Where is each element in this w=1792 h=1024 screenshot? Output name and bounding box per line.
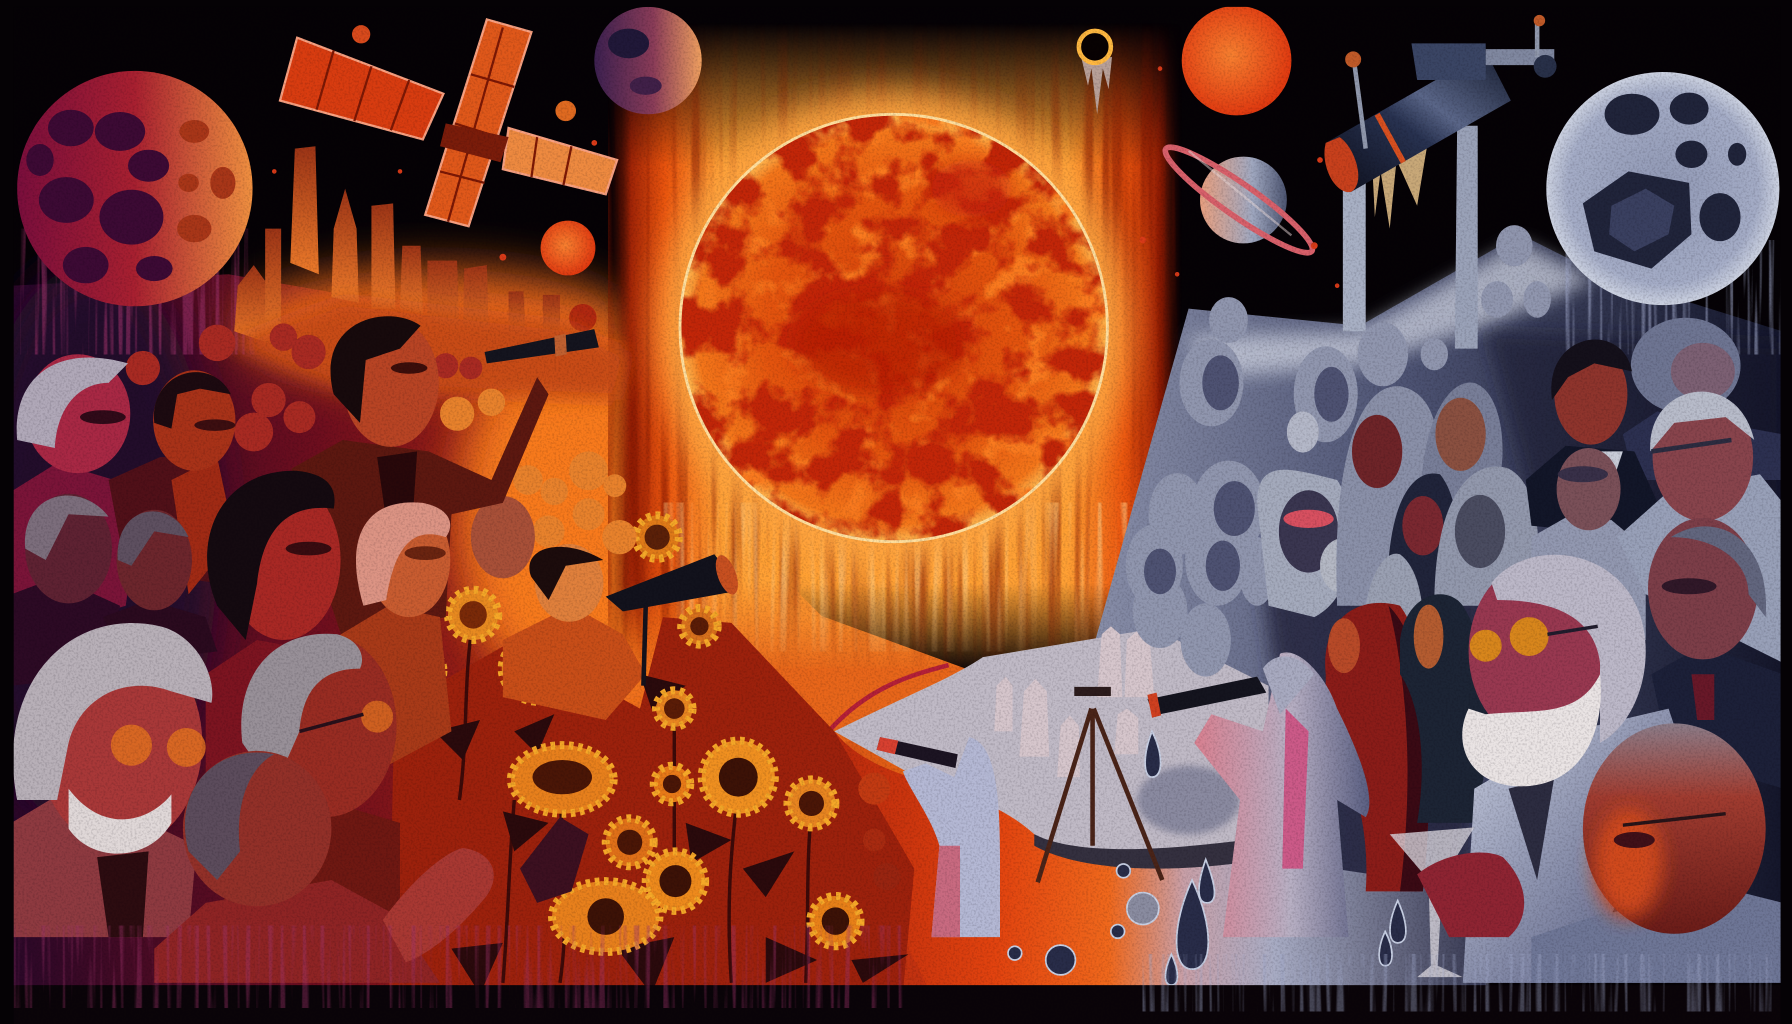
bald man with hands (154, 751, 589, 983)
large white-haired man with glasses (11, 623, 212, 937)
woman with telescope in robe (1147, 652, 1369, 937)
right men in suits (1526, 318, 1783, 789)
water (549, 731, 1486, 1006)
right hill of hooded figures (1086, 234, 1783, 983)
person: dark old man (11, 494, 120, 686)
right moon (1546, 72, 1783, 354)
bald man lower right (1531, 723, 1783, 983)
woman with pale hair (331, 502, 451, 777)
ringed planet (1157, 136, 1321, 264)
eclipse ring (1079, 31, 1112, 114)
left warm backdrop (0, 263, 1029, 1006)
small planets left (352, 25, 597, 331)
person: old man in suit (103, 510, 217, 663)
person: white-haired man upper left (11, 354, 137, 640)
man dark hair in suit (1526, 339, 1663, 537)
man bald grey top right (1623, 318, 1783, 480)
top purple planet (594, 7, 702, 114)
small man with glasses (1531, 448, 1646, 640)
red hooded cloak figure (1325, 603, 1430, 891)
person: man with glasses (109, 370, 235, 594)
left crowd: back row men (11, 354, 235, 686)
hooded figures, front group (1336, 382, 1538, 674)
bearded man with glasses (1462, 555, 1691, 983)
child in hood with telescope (877, 737, 1000, 937)
left cratered planet (17, 71, 255, 354)
old man with glasses (1617, 392, 1783, 663)
telescope woman with dark ponytail (503, 544, 742, 720)
bald old man right (1648, 518, 1783, 789)
sparse red stars (272, 66, 1339, 288)
orange planet top right (1182, 6, 1291, 115)
water droplets (1008, 731, 1406, 985)
sun (674, 109, 1114, 549)
tripod (1038, 691, 1162, 882)
orange city skyline (229, 146, 629, 400)
silver shore and ghost figures (829, 626, 1269, 869)
sun corona with vertical streaks (608, 23, 1182, 669)
dripping bottom border (0, 926, 1792, 1024)
left crowd: distant skull faces (126, 323, 637, 578)
left sunflower field (389, 515, 914, 994)
hand holding martini glass (1390, 827, 1524, 977)
satellite (280, 19, 617, 226)
dark teal hooded figure (1400, 594, 1488, 823)
hooded crowd, silver side (1126, 225, 1551, 677)
man with glasses, grey hair (206, 634, 400, 926)
woman with dark hair (206, 471, 343, 800)
man with raised telescope (291, 316, 599, 640)
big telescope on stand (1324, 15, 1557, 349)
